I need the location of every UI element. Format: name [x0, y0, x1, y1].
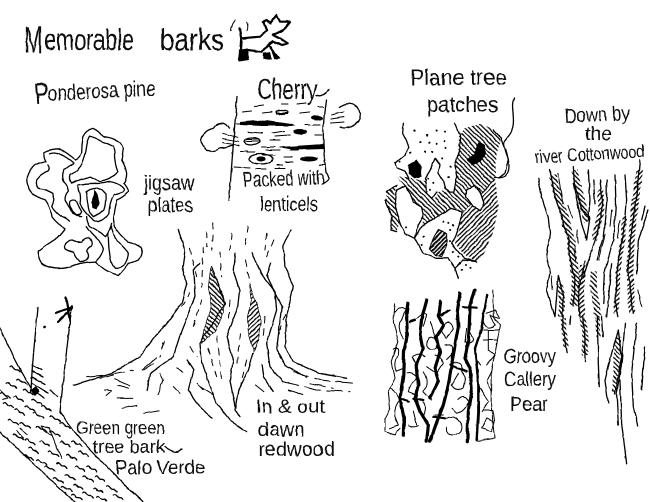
- heading: plane tree patches: patches: [427, 92, 498, 117]
- label: groovy callery pear: Callery: [504, 369, 556, 391]
- heading: down by the river cottonwood: Down by: [564, 103, 630, 128]
- title: [24, 20, 224, 62]
- heading: ponderosa pine: [34, 75, 156, 111]
- title: emorable: [44, 22, 134, 57]
- ponderosa jigsaw plates drawing: [27, 128, 142, 275]
- label: jigsaw plates: plates: [148, 194, 193, 217]
- heading: down by the river cottonwood: [534, 103, 645, 167]
- cherry bark drawing with lenticels: [229, 96, 329, 201]
- label: green green tree bark palo verde: [76, 418, 205, 479]
- label: groovy callery pear: Pear: [510, 394, 548, 416]
- label: in and out dawn redwood: redwood: [258, 439, 335, 461]
- label: packed with lenticels: [242, 166, 325, 216]
- label: green green tree bark palo verde: Green green: [76, 418, 165, 438]
- label: in and out dawn redwood: dawn: [258, 420, 305, 441]
- label: groovy callery pear: [504, 346, 556, 416]
- label: green green tree bark palo verde: Palo Verde: [115, 458, 205, 479]
- label: jigsaw plates: jigsaw: [143, 172, 195, 195]
- heading: ponderosa pine: onderosa pine: [47, 75, 156, 106]
- heading: ponderosa pine: P: [34, 77, 49, 111]
- label: groovy callery pear: Groovy: [504, 346, 556, 368]
- icon: left puff of air: [201, 123, 239, 151]
- label: green green tree bark palo verde: tree bark: [93, 437, 166, 457]
- heading: plane tree patches: Plane tree: [410, 65, 507, 90]
- groovy callery pear bark drawing: [385, 290, 500, 442]
- heading: down by the river cottonwood: the: [585, 124, 612, 145]
- title: M: [24, 20, 43, 62]
- plane tree patches drawing: [385, 123, 508, 278]
- palo verde branch drawing: [0, 298, 143, 502]
- heading: cherry: Cherry: [257, 74, 317, 106]
- icon: right puff of air: [331, 104, 360, 128]
- dawn redwood trunk drawing: [73, 223, 353, 432]
- label: jigsaw plates: [143, 172, 195, 217]
- label: in and out dawn redwood: [256, 397, 335, 461]
- label: packed with lenticels: Packed with: [242, 166, 325, 192]
- heading: plane tree patches: [410, 65, 507, 117]
- icon: barking dog: [231, 15, 290, 62]
- label: packed with lenticels: lenticels: [260, 194, 318, 216]
- label: in and out dawn redwood: In & out: [256, 397, 326, 418]
- squiggle beside plane tree patches: [494, 98, 514, 178]
- cottonwood bark drawing: [538, 160, 648, 463]
- title: barks: [160, 22, 224, 57]
